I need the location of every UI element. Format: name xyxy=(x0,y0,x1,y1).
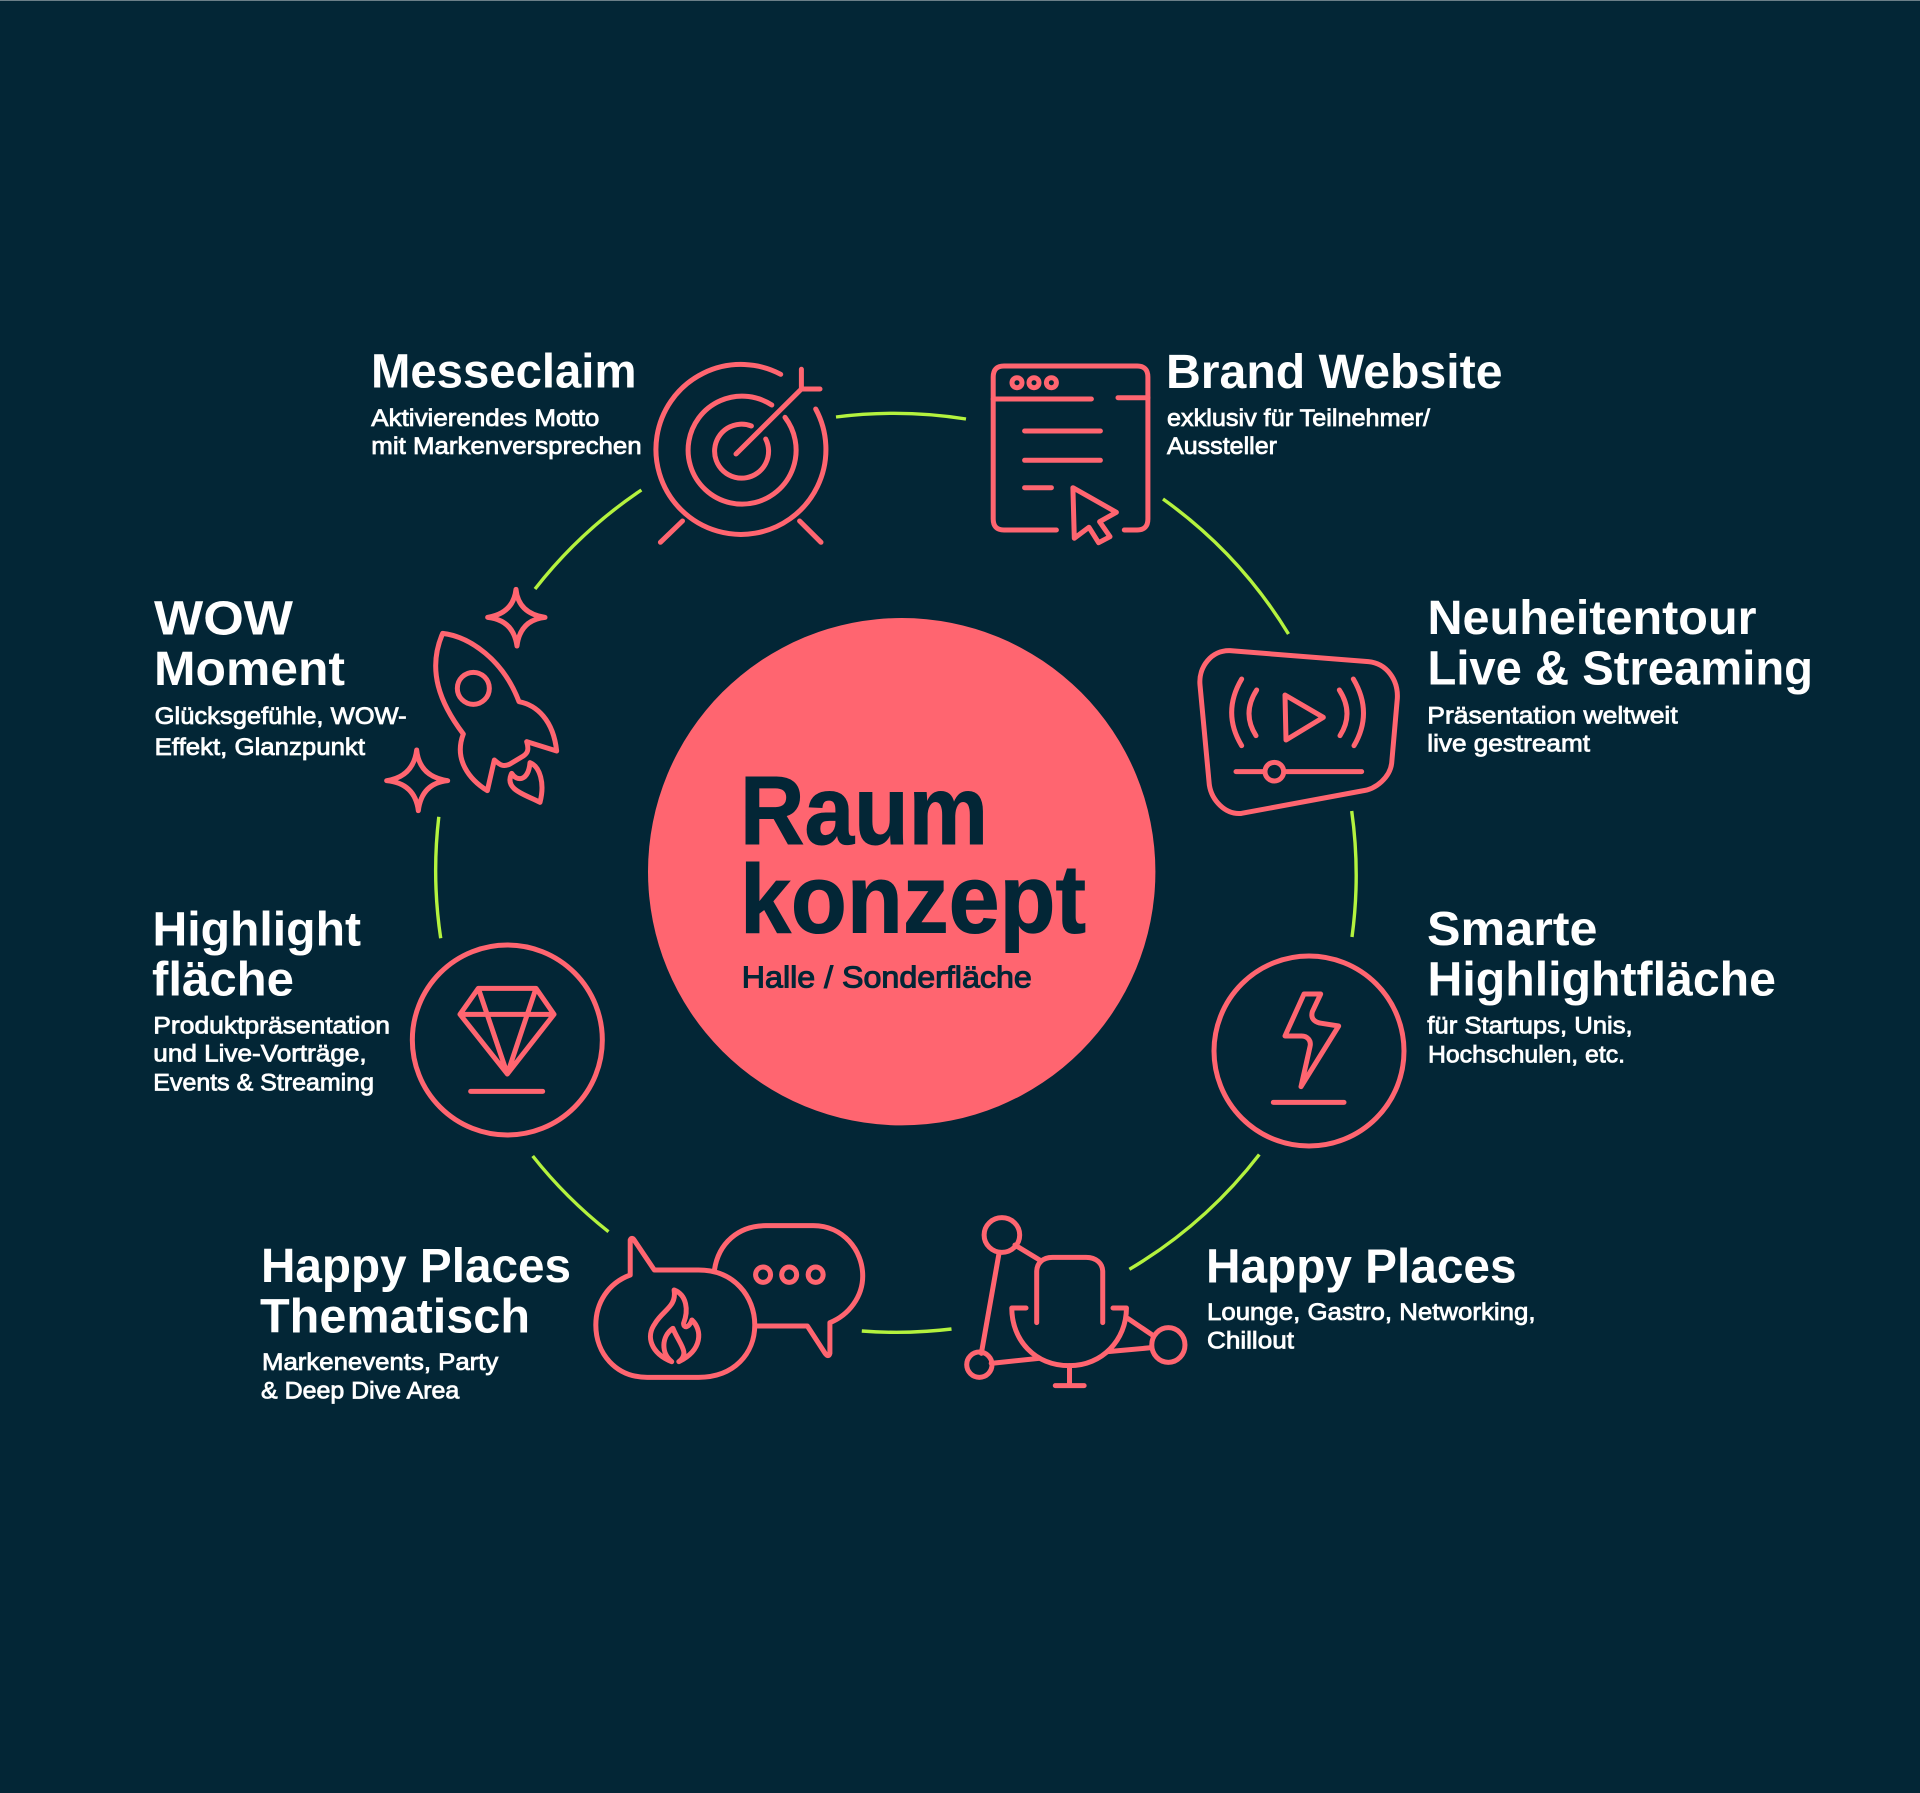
center title xyxy=(740,756,1086,954)
text: Neuheitentour description: live gestreamt xyxy=(1427,731,1590,758)
heading: Happy Places Thematisch: Happy Places xyxy=(261,1240,571,1293)
heading: Smarte Highlightfläche: Highlightfläche xyxy=(1428,954,1776,1006)
center title: Raum xyxy=(740,756,988,865)
heading: Smarte Highlightfläche xyxy=(1427,903,1776,1006)
heading: Highlight fläche: Highlight xyxy=(152,904,361,956)
text: Happy Places Thematisch description xyxy=(261,1349,499,1404)
heading: Happy Places Thematisch: Thematisch xyxy=(260,1290,530,1344)
text: Happy Places description: Lounge, Gastro, Networking, xyxy=(1207,1299,1536,1326)
heading: Highlight fläche xyxy=(152,904,361,1006)
heading: Messeclaim: Messeclaim xyxy=(371,345,636,398)
text: WOW Moment description xyxy=(155,703,407,761)
icon: video player xyxy=(1200,651,1397,813)
text: Happy Places Thematisch description: & Deep Dive Area xyxy=(261,1377,460,1404)
panel: Brand Website xyxy=(993,346,1502,543)
text: Brand Website description: Aussteller xyxy=(1167,433,1277,460)
text: Happy Places description: Chillout xyxy=(1207,1327,1294,1354)
text: Messeclaim description xyxy=(371,405,642,460)
text: Highlightfläche description xyxy=(153,1012,390,1097)
text: Happy Places description xyxy=(1207,1299,1536,1354)
text: WOW Moment description: Effekt, Glanzpunkt xyxy=(155,734,365,761)
panel: Highlightfläche xyxy=(152,904,602,1135)
text: Smarte Highlightfläche description: für Startups, Unis, xyxy=(1427,1012,1633,1039)
heading: Highlight fläche: fläche xyxy=(152,954,294,1006)
icon: microphone network xyxy=(967,1218,1185,1386)
text: Brand Website description: exklusiv für Teilnehmer/ xyxy=(1167,405,1430,432)
heading: WOW Moment: Moment xyxy=(154,643,345,696)
heading: Happy Places: Happy Places xyxy=(1206,1240,1516,1294)
panel: Messeclaim xyxy=(371,345,826,542)
text: Smarte Highlightfläche description xyxy=(1427,1012,1633,1068)
text: Smarte Highlightfläche description: Hochschulen, etc. xyxy=(1428,1041,1625,1068)
connector ring xyxy=(436,413,1356,1332)
panel: Happy Places xyxy=(967,1218,1536,1386)
text: Highlightfläche description: Produktpräsentation xyxy=(153,1012,390,1039)
icon: diamond in circle xyxy=(412,945,602,1135)
icon: chat bubbles with flame xyxy=(596,1226,863,1377)
center subtitle: Halle / Sonderfläche xyxy=(742,960,1032,995)
panel: center circle xyxy=(648,618,1155,1125)
panel: Happy Places Thematisch xyxy=(260,1226,863,1404)
heading: Happy Places Thematisch xyxy=(260,1240,571,1344)
text: Highlightfläche description: und Live-Vorträge, xyxy=(153,1041,367,1068)
text: Messeclaim description: mit Markenversprechen xyxy=(371,433,642,460)
heading: WOW Moment xyxy=(154,592,345,696)
heading: WOW Moment: WOW xyxy=(154,592,294,645)
text: Highlightfläche description: Events & Streaming xyxy=(153,1070,374,1097)
icon: lightning bolt in circle xyxy=(1214,956,1404,1146)
text: Neuheitentour description xyxy=(1427,702,1678,758)
heading: Neuheitentour Live & Streaming xyxy=(1428,592,1813,696)
icon: rocket with stars xyxy=(387,589,557,811)
heading: Neuheitentour Live & Streaming: Neuheitentour xyxy=(1428,592,1756,645)
panel: Smarte Highlightfläche xyxy=(1214,903,1776,1146)
icon: browser window with cursor xyxy=(993,366,1148,543)
icon: target with arrow xyxy=(656,364,826,542)
text: WOW Moment description: Glücksgefühle, WOW- xyxy=(155,703,407,730)
center title: konzept xyxy=(740,844,1086,954)
heading: Smarte Highlightfläche: Smarte xyxy=(1427,903,1598,956)
panel: Neuheitentour xyxy=(1200,592,1813,813)
text: Messeclaim description: Aktivierendes Motto xyxy=(371,405,599,432)
heading: Neuheitentour Live & Streaming: Live & Streaming xyxy=(1428,642,1813,696)
text: Neuheitentour description: Präsentation weltweit xyxy=(1427,702,1678,729)
heading: Brand Website: Brand Website xyxy=(1166,346,1502,399)
panel: WOW Moment xyxy=(154,589,557,811)
text: Brand Website description xyxy=(1167,405,1430,460)
text: Happy Places Thematisch description: Markenevents, Party xyxy=(262,1349,499,1376)
